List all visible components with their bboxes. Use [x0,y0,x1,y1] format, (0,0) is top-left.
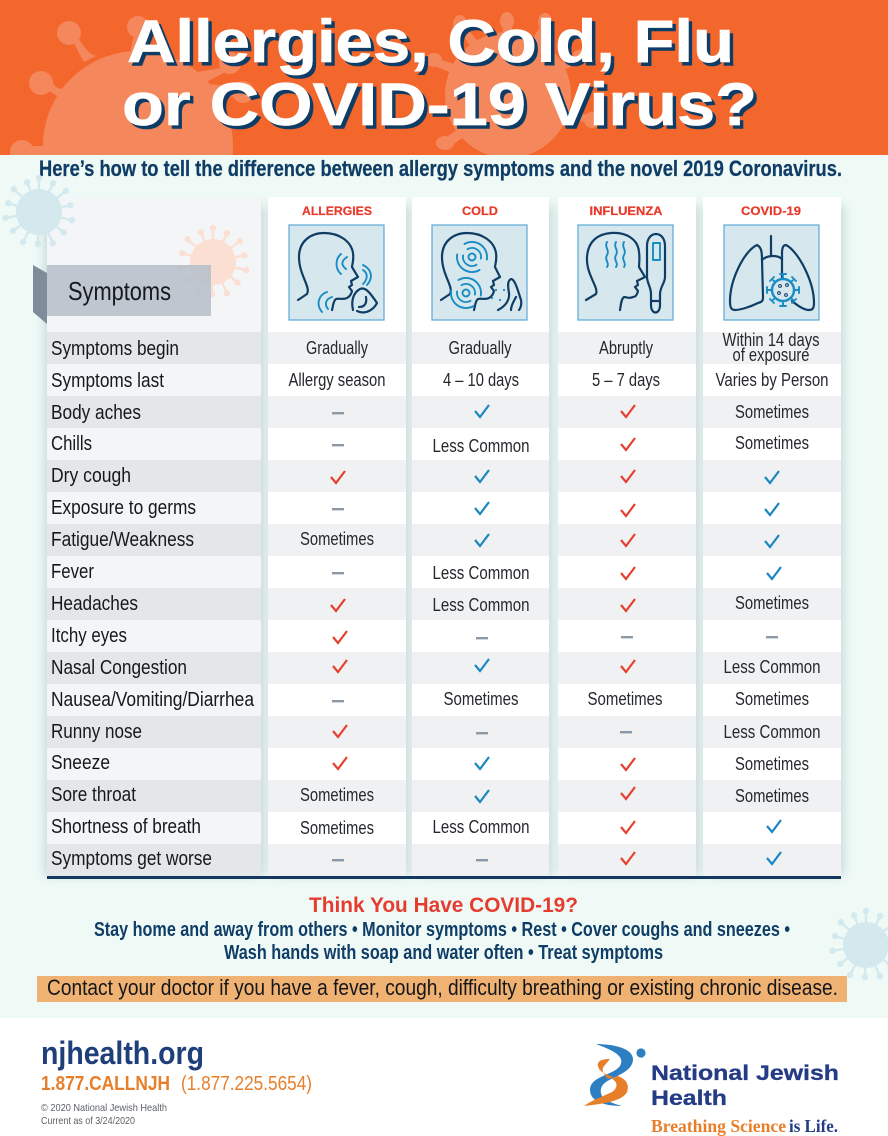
icon: large viruses in header [10,12,598,155]
row: Fever: Fever [51,561,94,583]
advice list [94,919,790,964]
row: Sneeze: Sometimes [735,754,809,774]
phone numbers: 1.877.CALLNJH [41,1072,170,1095]
phone numbers [41,1072,312,1095]
row: Shortness of breath: Less Common [432,817,530,837]
row: Headaches: Sometimes [735,593,809,613]
row: Fatigue/Weakness [47,524,841,556]
copyright: Current as of 3/24/2020 [41,1115,135,1127]
row: Sore throat: Sometimes [300,785,374,805]
row: Symptoms begin: Within 14 days [722,330,820,350]
row: Symptoms last: Allergy season [288,370,386,390]
row: Exposure to germs: Exposure to germs [51,497,196,519]
row: Nausea/Vomiting/Diarrhea [51,689,809,711]
row: Itchy eyes: Itchy eyes [51,625,127,647]
row: Sneeze [51,752,809,774]
logo: National Jewish Health: Health [651,1087,727,1110]
symptoms heading tab: Symptoms [68,276,171,306]
row: Symptoms begin: Abruptly [599,338,653,358]
row: Symptoms last [51,370,828,392]
column head: cold [432,206,527,320]
title: Allergies, Cold, Flu [127,8,734,75]
column head: allergies [289,206,384,320]
row: Sore throat: Sometimes [735,786,809,806]
row: Body aches [47,396,841,428]
symptoms heading tab [33,265,211,324]
row: Nasal Congestion: Less Common [724,657,820,677]
row: Body aches: Sometimes [735,402,809,422]
title [122,8,757,138]
row: Headaches [47,588,841,620]
copyright [41,1102,167,1127]
row: Runny nose: Less Common [724,722,820,742]
website: njhealth.org [41,1035,204,1071]
logo: National Jewish Health [584,1044,839,1136]
icon: lungs with virus [724,225,819,320]
row: Nasal Congestion: Nasal Congestion [51,657,187,679]
row: Runny nose: Runny nose [51,721,142,743]
icon: head with congestion [432,225,527,320]
logo: National Jewish Health: National Jewish [651,1062,839,1085]
advice heading: Think You Have COVID-19? [309,894,578,917]
icon: peach virus [176,225,250,297]
row: Symptoms get worse: Symptoms get worse [51,848,212,870]
column head: cold: COLD [462,206,498,218]
advice list: Wash hands with soap and water often • Treat symptoms [224,942,663,964]
row: Chills [51,433,809,456]
row: Nausea/Vomiting/Diarrhea: Sometimes [588,689,662,709]
column head: covid-19: COVID-19 [741,206,801,218]
row: Nausea/Vomiting/Diarrhea: Nausea/Vomiting/Diarrhea [51,689,255,711]
row: Symptoms last: 5 – 7 days [592,370,660,390]
icon: blue virus right [829,908,888,980]
tagline: is Life. [789,1116,838,1136]
copyright: © 2020 National Jewish Health [41,1102,167,1114]
row: Shortness of breath [51,816,781,838]
icon: blue virus top left [2,175,76,247]
row: Shortness of breath: Sometimes [300,818,374,838]
row: Symptoms begin [47,330,841,365]
row: Symptoms begin: Gradually [448,338,512,358]
column shadows [44,205,844,876]
row: Dry cough: Dry cough [51,465,131,487]
row: Fatigue/Weakness: Sometimes [300,529,374,549]
icon: head with thermometer [578,225,673,320]
advice block [94,894,790,964]
icon: helix [584,1044,646,1106]
row: Sore throat: Sore throat [51,784,136,806]
row: Sneeze: Sneeze [51,752,110,774]
column head: allergies: ALLERGIES [302,206,372,218]
row: Symptoms last: 4 – 10 days [443,370,519,390]
phone numbers: (1.877.225.5654) [181,1072,312,1095]
column head: influenza [578,206,673,320]
row: Symptoms last: Symptoms last [51,370,164,392]
row: Symptoms get worse [47,844,841,876]
row: Symptoms last: Varies by Person [716,370,828,390]
row: Symptoms begin: of exposure [732,345,810,365]
row: Nausea/Vomiting/Diarrhea: Sometimes [735,689,809,709]
row: Symptoms begin: Symptoms begin [51,338,179,360]
row: Chills: Chills [51,433,92,455]
row: Headaches: Headaches [51,593,138,615]
row: Nasal Congestion [47,652,841,684]
row: Chills: Less Common [432,436,530,456]
row: Chills: Sometimes [735,433,809,453]
row: Dry cough [47,460,841,492]
title: or COVID-19 Virus? [122,71,757,138]
row: Shortness of breath: Shortness of breath [51,816,201,838]
row: Symptoms begin: Gradually [306,338,368,358]
footer [0,1018,888,1136]
column head: covid-19 [724,206,819,320]
row: Fatigue/Weakness: Fatigue/Weakness [51,529,194,551]
row: Headaches: Less Common [432,595,530,615]
row: Exposure to germs [51,497,779,519]
row: Itchy eyes [51,625,778,647]
header banner [0,0,888,155]
tagline: Breathing Science [651,1116,786,1136]
table columns [47,197,841,876]
row: Runny nose [47,716,841,748]
row: Sore throat [47,780,841,812]
column head: influenza: INFLUENZA [590,206,662,218]
icon: sneezing head [289,225,384,320]
row: Body aches: Body aches [51,402,141,424]
row: Fever: Less Common [432,563,530,583]
row: Nausea/Vomiting/Diarrhea: Sometimes [444,689,518,709]
row: Fever [51,561,781,583]
